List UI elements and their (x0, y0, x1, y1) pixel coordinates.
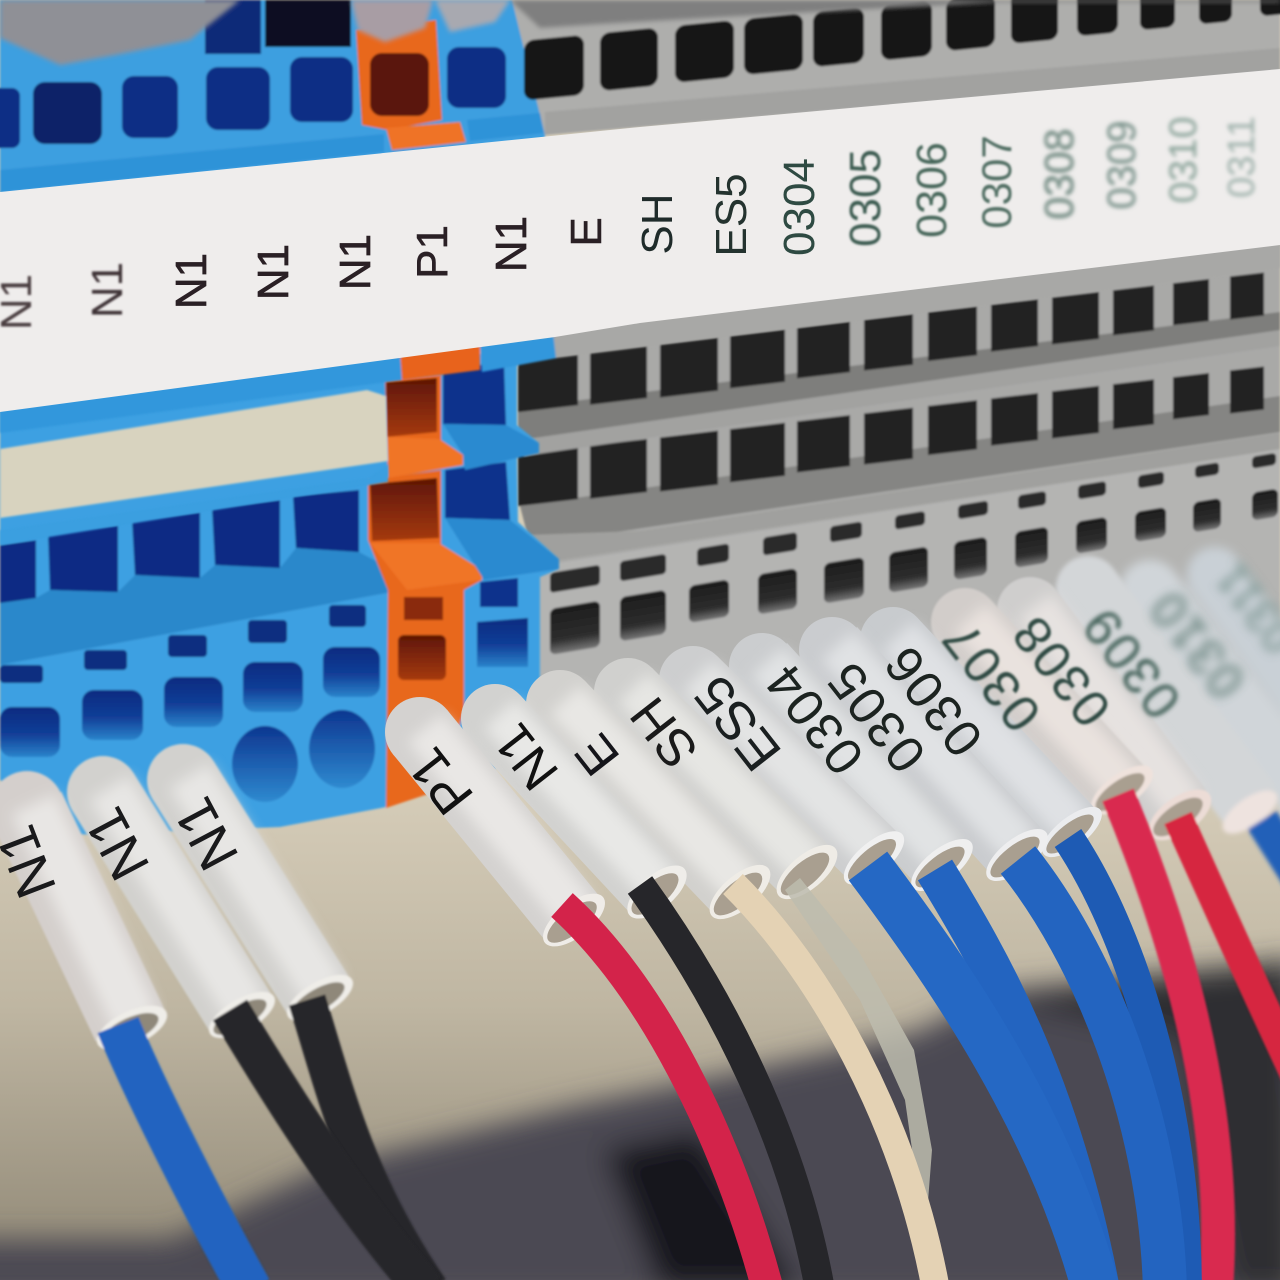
orange sockets (370, 378, 446, 680)
strip labels: N1 (83, 262, 132, 318)
sleeve labels: 0309 (1071, 596, 1193, 729)
blue upper terminals (0, 0, 545, 195)
blurred dark equipment at bottom (0, 960, 1280, 1280)
gray middle base (515, 240, 1280, 580)
far right out-of-focus sleeves (1120, 547, 1280, 800)
orange lips (370, 437, 482, 590)
sleeve 0304 with blue wire (729, 633, 1100, 1280)
sleeve labels: 0305 (816, 650, 938, 783)
sleeve 0306 with blue wire (860, 607, 1186, 1280)
sleeve 0305 with blue wire (799, 617, 1165, 1280)
strip labels: 0305 (841, 149, 890, 247)
orange terminal upper part (385, 375, 463, 478)
sleeve labels: P1 (397, 737, 485, 826)
middle sockets row one (518, 273, 1264, 414)
row of sleeves out of focus at top (0, 0, 1280, 65)
sleeve P1 with red wire (385, 697, 768, 1280)
sleeve labels: 0304 (754, 652, 876, 785)
upper gray sockets (524, 0, 1280, 101)
round sockets (232, 710, 375, 802)
upper blue terminal sockets (0, 0, 506, 148)
strip labels: N1 (167, 253, 216, 309)
strip labels: N1 (249, 244, 298, 300)
sleeve N1 third with black wire (147, 744, 430, 1280)
sleeve N1 second with black wire (67, 756, 425, 1280)
sleeve labels: 0310 (1138, 580, 1255, 709)
sleeve labels: 0306 (873, 634, 995, 767)
dark blue middle row sockets (0, 490, 359, 608)
lower row B sockets (0, 647, 380, 757)
orange terminal lower part (368, 470, 482, 808)
strip labels: 0304 (775, 158, 824, 256)
lower row A sockets (0, 605, 366, 683)
wall background (0, 780, 1280, 1280)
upper terminal row (0, 0, 1280, 195)
middle sockets row two (518, 367, 1264, 508)
sleeve labels: N1 (161, 788, 250, 881)
sleeve 0307 with red wire (931, 588, 1218, 1280)
right blue sockets (443, 362, 528, 667)
strip labels: 0308 (1036, 128, 1082, 220)
blue lips under strip (0, 352, 402, 433)
middle gray block (515, 240, 1280, 760)
sleeve E with cream wire (526, 670, 936, 1280)
sleeve 0308 with red wire (997, 577, 1280, 1085)
gray rib one (520, 330, 1280, 456)
lower floor shading row two (520, 396, 1280, 545)
sleeve labels: SH (620, 686, 710, 779)
orange lip under strip (400, 345, 480, 380)
sleeve 0311 (1187, 547, 1280, 730)
sleeve labels (0, 553, 1280, 907)
strip labels: ES5 (707, 173, 756, 257)
strip labels: N1 (331, 234, 380, 290)
strip labels: E (562, 217, 611, 247)
wire and sleeve set, right to left (0, 556, 1280, 1280)
sleeve labels: N1 (72, 798, 161, 891)
strip labels: 0311 (1221, 116, 1263, 198)
sleeve labels: 0307 (931, 609, 1053, 742)
lower sockets row zero (550, 453, 1276, 593)
upper lips (0, 48, 1280, 192)
blue band under beige block (0, 464, 388, 545)
strip labels: P1 (408, 225, 457, 279)
gray upper terminals (512, 0, 1280, 135)
light gray lower base (538, 449, 1280, 760)
label strip under lips (0, 240, 1280, 545)
sleeve N1 first with blue wire (0, 771, 250, 1280)
sleeve 0309 with blue wire (1056, 556, 1280, 880)
sloped blue floor (0, 548, 408, 665)
sleeve labels: ES5 (683, 664, 793, 782)
orange upper terminal (356, 20, 442, 130)
lower sockets row A (550, 488, 1278, 655)
upper orange socket (370, 53, 429, 116)
sleeve 0310 (1120, 560, 1280, 800)
sleeve ES5 with blue wire (659, 646, 1096, 1280)
sleeve labels: 0308 (1001, 604, 1123, 737)
strip labels: SH (633, 193, 682, 255)
strip labels: 0309 (1100, 121, 1144, 209)
beige jumper bar (0, 390, 388, 518)
strip labels: 0306 (908, 142, 956, 238)
white marker strip (0, 69, 1280, 412)
blue lower block (0, 350, 559, 835)
sleeve N1 with black wire (461, 684, 820, 1280)
gray rib two (528, 433, 1280, 560)
sleeve labels: N1 (483, 712, 570, 801)
sleeve SH with transparent wire (594, 658, 932, 1240)
strip labels: 0310 (1162, 117, 1205, 203)
strip labels: N1 (487, 216, 536, 272)
sleeve labels: E (564, 723, 631, 786)
blue floors right (443, 424, 559, 580)
strip labels: 0307 (973, 135, 1020, 229)
strip labels (0, 116, 1263, 330)
gray lips under strip (553, 240, 1280, 358)
blue lip right under strip (480, 336, 557, 372)
blue base (0, 350, 559, 835)
lower floor shading row one (518, 312, 1280, 442)
